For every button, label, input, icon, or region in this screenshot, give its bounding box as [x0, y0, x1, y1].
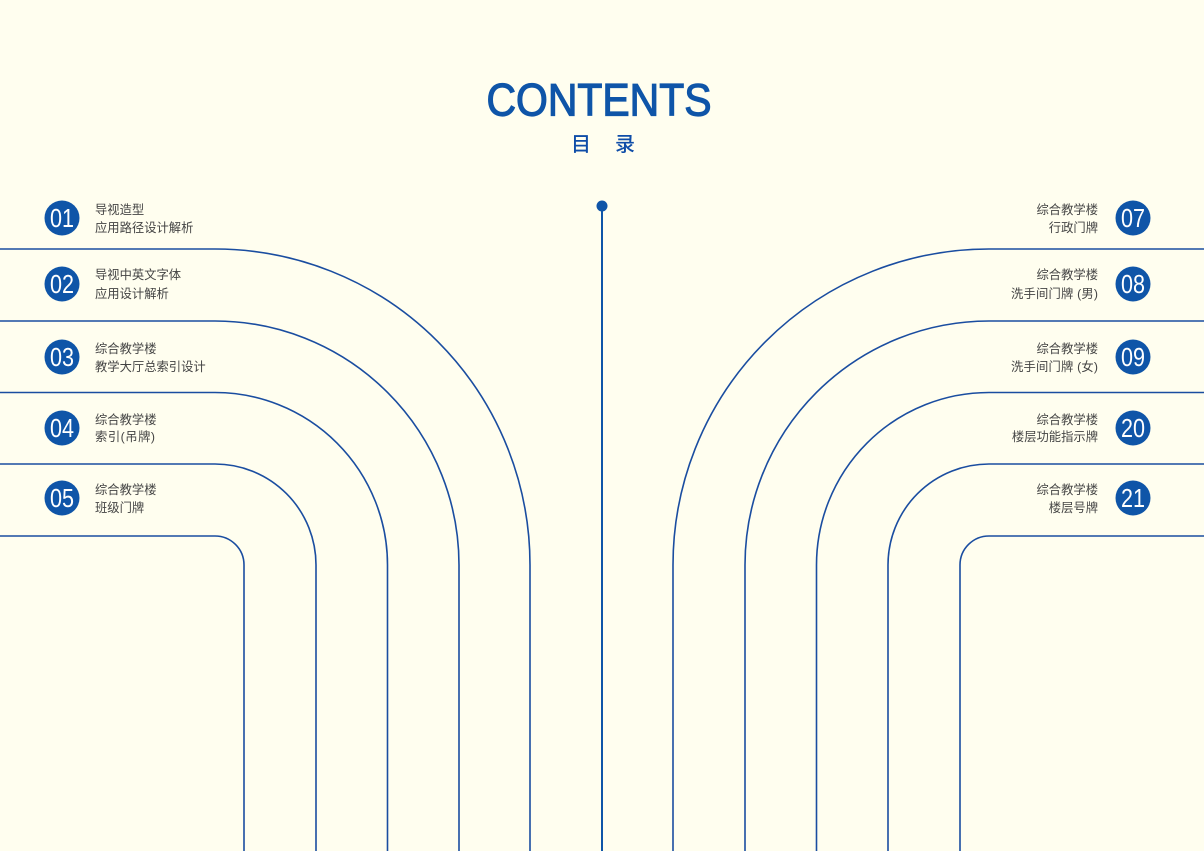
item 09: 09 [1121, 342, 1145, 372]
item 08: 08 [1121, 269, 1145, 299]
item 04: 04 [50, 413, 74, 443]
item 07: 07 [1121, 203, 1145, 233]
item 05: 05 [50, 483, 74, 513]
item 09: 综合教学楼 [1036, 341, 1098, 356]
item 21: 综合教学楼 [1036, 482, 1098, 497]
item 02: 应用设计解析 [95, 286, 169, 301]
title: CONTENTS [486, 74, 712, 125]
item 01: 01 [50, 203, 74, 233]
item 01 [44, 200, 193, 236]
item 03: 教学大厅总索引设计 [95, 359, 206, 374]
item 07: 行政门牌 [1049, 220, 1098, 235]
item 01: 导视造型 [95, 202, 144, 217]
item 08 [1011, 266, 1150, 302]
item 04: 综合教学楼 [95, 412, 156, 427]
item 08: 洗手间门牌 (男) [1011, 286, 1098, 301]
item 01: 应用路径设计解析 [95, 220, 193, 235]
item 07: 综合教学楼 [1036, 202, 1098, 217]
item 03: 03 [50, 342, 74, 372]
item 03 [44, 340, 206, 374]
item 07 [1036, 200, 1150, 236]
item 20: 楼层功能指示牌 [1012, 429, 1098, 444]
item 20: 综合教学楼 [1036, 412, 1098, 427]
item 09 [1011, 340, 1150, 374]
item 02: 02 [50, 269, 74, 299]
item 02: 导视中英文字体 [95, 267, 181, 282]
item 04: 索引(吊牌) [95, 429, 155, 444]
item 05: 班级门牌 [95, 500, 144, 515]
left curved lines [0, 249, 530, 851]
item 20 [1012, 410, 1150, 446]
right curved lines [673, 249, 1204, 851]
item 05: 综合教学楼 [95, 482, 156, 497]
item 05 [44, 480, 156, 516]
item 04 [44, 410, 156, 446]
subtitle: 目 录 [571, 134, 635, 156]
item 21: 21 [1121, 483, 1145, 513]
item 08: 综合教学楼 [1036, 267, 1098, 282]
item 21: 楼层号牌 [1049, 500, 1098, 515]
centre line with dot [596, 200, 608, 851]
item 21 [1036, 480, 1150, 516]
item 02 [44, 266, 181, 302]
item 09: 洗手间门牌 (女) [1011, 359, 1098, 374]
item 20: 20 [1121, 413, 1145, 443]
item 03: 综合教学楼 [95, 341, 156, 356]
